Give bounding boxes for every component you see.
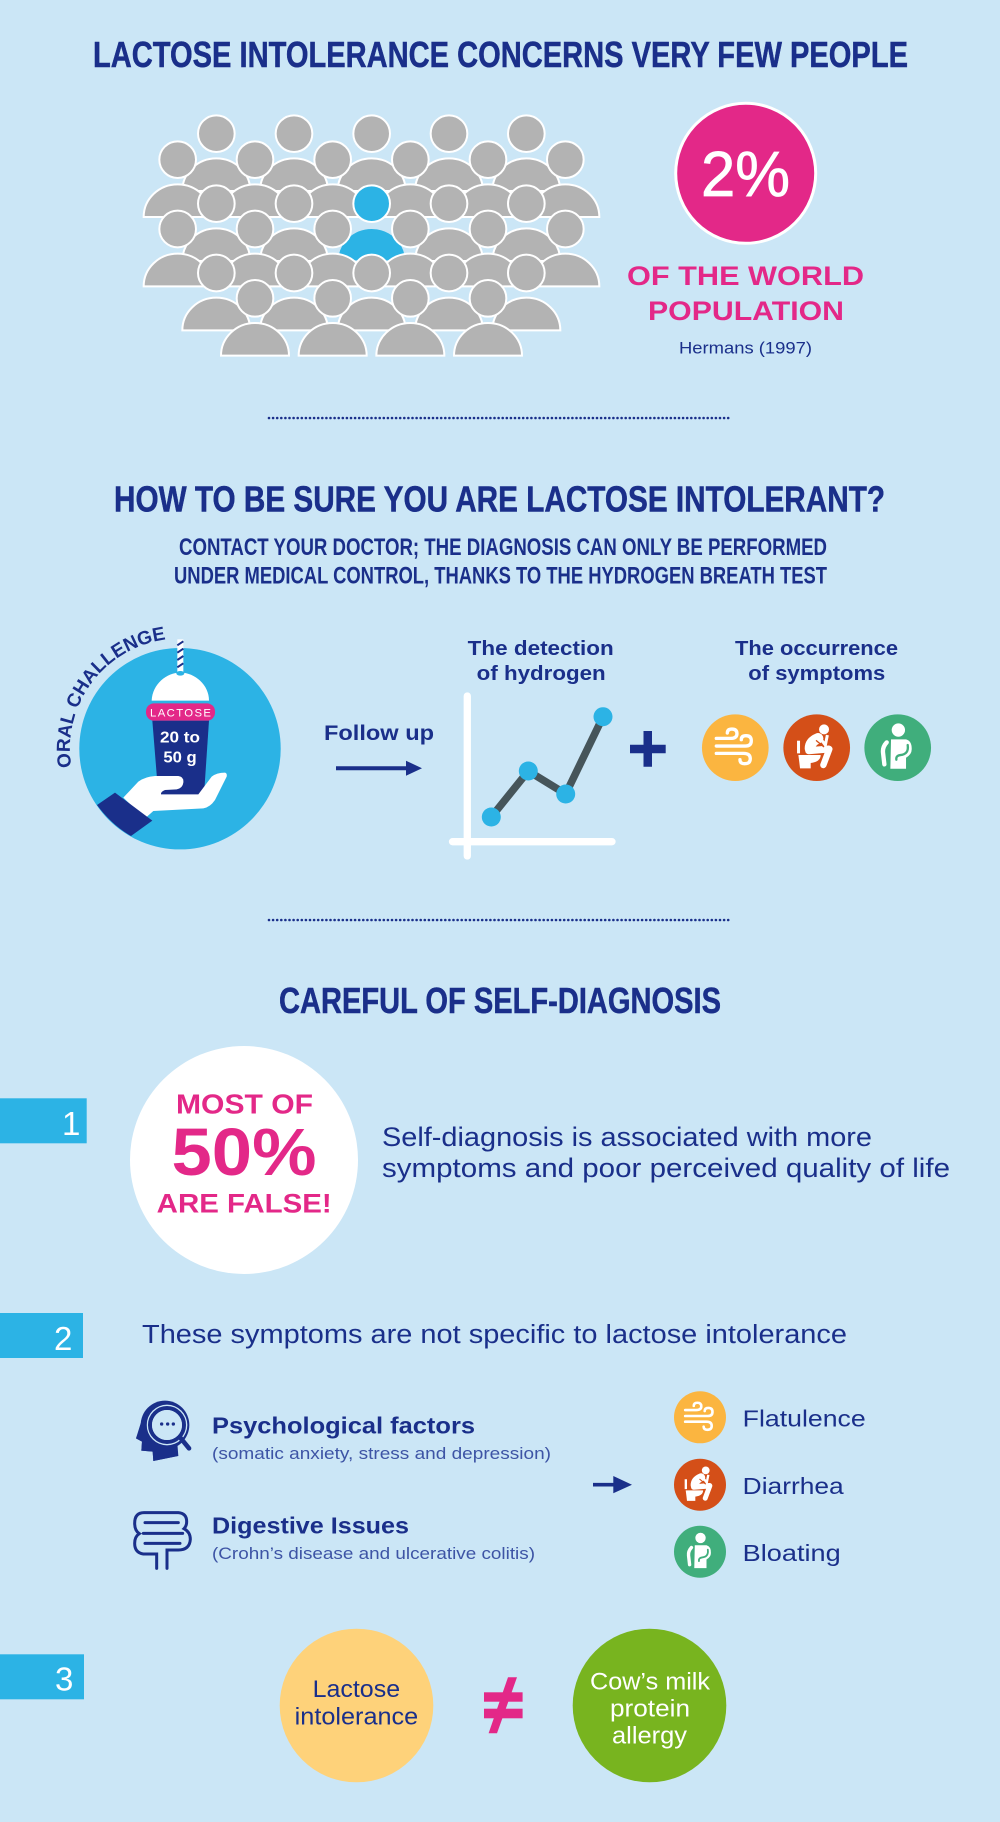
tag: number 1 <box>0 1098 87 1143</box>
subheading: contact your doctor: CONTACT YOUR DOCTOR; THE DIAGNOSIS CAN ONLY BE PERFORMED <box>179 534 827 561</box>
circle: cow's milk protein allergy: allergy <box>612 1722 687 1749</box>
cup with hand: 50 g <box>163 750 197 767</box>
tag: number 3 <box>0 1654 84 1699</box>
icon: head with magnifier <box>136 1401 189 1461</box>
callout: most of 50% are false <box>130 1046 358 1274</box>
arrow: causes to symptoms <box>593 1476 632 1493</box>
source: Hermans (1997) <box>679 339 812 357</box>
tag: number 3: 3 <box>55 1661 73 1698</box>
label: diarrhea: Diarrhea <box>743 1473 844 1499</box>
circle: cow's milk protein allergy: Cow’s milk <box>590 1668 711 1695</box>
panel: detection of hydrogen <box>452 637 614 856</box>
psychological factors text: Psychological factors <box>212 1412 475 1438</box>
heading: of hydrogen <box>477 662 606 685</box>
subheading: contact your doctor <box>174 534 827 590</box>
follow up label: Follow up <box>324 721 434 745</box>
tag: number 2: 2 <box>54 1320 72 1357</box>
world population label: OF THE WORLD <box>627 261 864 291</box>
panel: occurrence of symptoms <box>702 637 931 781</box>
cup with hand <box>97 639 227 836</box>
cup with hand: 20 to <box>160 730 200 747</box>
cup with hand: LACTOSE <box>150 708 211 720</box>
circle: lactose intolerance: intolerance <box>295 1703 418 1730</box>
callout: most of 50% are false: ARE FALSE! <box>157 1189 332 1219</box>
digestive issues text: Digestive Issues <box>212 1512 409 1538</box>
icon: intestine <box>135 1513 190 1568</box>
callout: most of 50% are false: 50% <box>172 1115 316 1190</box>
blue circle <box>79 648 281 849</box>
heading: The occurrence <box>735 637 898 660</box>
icon: flatulence <box>674 1391 726 1443</box>
callout: most of 50% are false: MOST OF <box>176 1088 313 1119</box>
psychological factors text <box>212 1412 551 1463</box>
icon: bloating <box>864 714 931 781</box>
text: self-diagnosis statement <box>382 1122 950 1183</box>
icon: oral challenge drink <box>56 626 281 850</box>
oral challenge curved label: ORAL CHALLENGE <box>56 626 166 768</box>
text: self-diagnosis statement: symptoms and poor perceived quality of life <box>382 1153 950 1183</box>
panel: symptom list <box>674 1391 866 1578</box>
label: flatulence: Flatulence <box>743 1406 866 1432</box>
world population label <box>627 261 864 326</box>
icon: diarrhea <box>674 1459 726 1511</box>
panel: causes <box>135 1401 551 1568</box>
heading: The detection <box>468 637 614 660</box>
icon: flatulence <box>702 714 769 781</box>
heading: careful of self-diagnosis: CAREFUL OF SELF-DIAGNOSIS <box>279 980 721 1021</box>
crowd of people icon <box>144 115 599 356</box>
circle: lactose intolerance <box>280 1629 433 1782</box>
circle: cow's milk protein allergy <box>573 1629 726 1782</box>
heading <box>468 637 614 685</box>
world population label: POPULATION <box>648 296 844 326</box>
psychological factors text: (somatic anxiety, stress and depression) <box>212 1444 551 1463</box>
pink circle with 2% <box>676 103 816 243</box>
arrow: follow up <box>336 761 422 776</box>
heading: of symptoms <box>748 662 885 685</box>
tag: number 2 <box>0 1313 83 1358</box>
digestive issues text: (Crohn’s disease and ulcerative colitis) <box>212 1544 535 1563</box>
panel: 2 percent statistic <box>627 103 864 357</box>
label: bloating: Bloating <box>743 1540 841 1566</box>
text: symptoms not specific: These symptoms are not specific to lactose intolerance <box>142 1321 847 1349</box>
plus sign <box>630 731 666 767</box>
circle: lactose intolerance: Lactose <box>313 1676 400 1703</box>
digestive issues text <box>212 1512 535 1563</box>
not-equal sign <box>484 1677 523 1733</box>
text: self-diagnosis statement: Self-diagnosis is associated with more <box>382 1122 872 1152</box>
icon: bloating <box>674 1526 726 1578</box>
circle: cow's milk protein allergy: protein <box>610 1696 690 1723</box>
heading <box>735 637 898 685</box>
tag: number 1: 1 <box>62 1105 80 1142</box>
pink circle with 2%: 2% <box>701 138 790 210</box>
icon: diarrhea <box>783 714 850 781</box>
line chart <box>452 696 612 856</box>
